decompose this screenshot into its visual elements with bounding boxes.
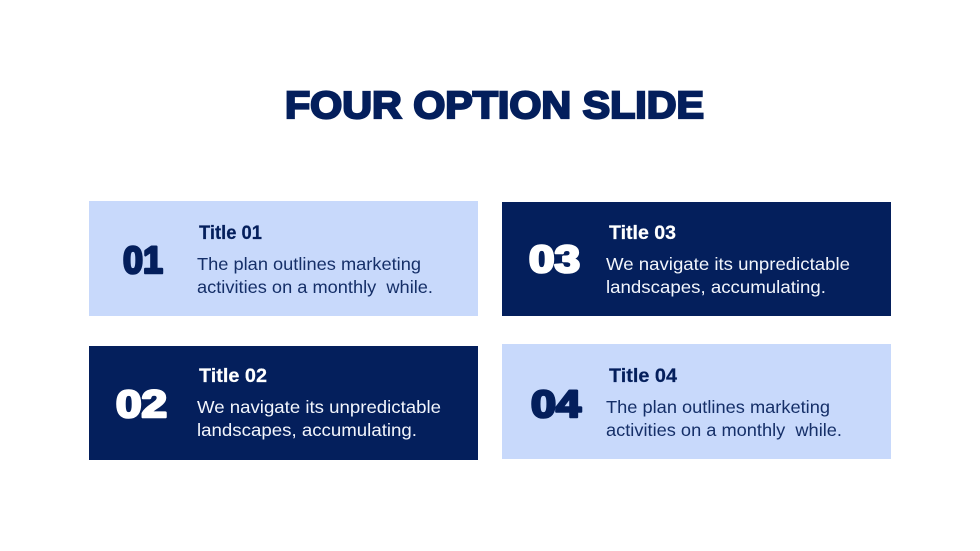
text block: option 03 description: We navigate its unpredictable (606, 254, 850, 274)
text block: option 01 description (197, 254, 433, 297)
text block: option 03 description (606, 254, 850, 297)
heading: Title 03: Title 03 (609, 223, 676, 244)
text block: option 02 description: landscapes, accumulating. (197, 420, 417, 440)
text block: option 01 description: The plan outlines marketing (197, 254, 421, 274)
number 02: 02 (116, 384, 167, 426)
title: FOUR OPTION SLIDE (285, 85, 704, 127)
text block: option 04 description (606, 397, 842, 440)
panel: option 01 (89, 201, 478, 316)
text block: option 02 description (197, 397, 441, 440)
panel: option 02 (89, 346, 478, 460)
heading: Title 02: Title 02 (199, 366, 267, 387)
text block: option 02 description: We navigate its unpredictable (197, 397, 441, 417)
number 01: 01 (123, 240, 163, 282)
text block: option 03 description: landscapes, accumulating. (606, 277, 826, 297)
heading: Title 04: Title 04 (609, 366, 677, 387)
number 03: 03 (529, 239, 580, 281)
panel: option 03 (502, 202, 891, 316)
number 04: 04 (531, 384, 581, 426)
text block: option 01 description: activities on a monthly while. (197, 277, 433, 297)
text block: option 04 description: activities on a monthly while. (606, 420, 842, 440)
panel: option 04 (502, 344, 891, 459)
heading: Title 01: Title 01 (199, 223, 262, 244)
text block: option 04 description: The plan outlines marketing (606, 397, 830, 417)
